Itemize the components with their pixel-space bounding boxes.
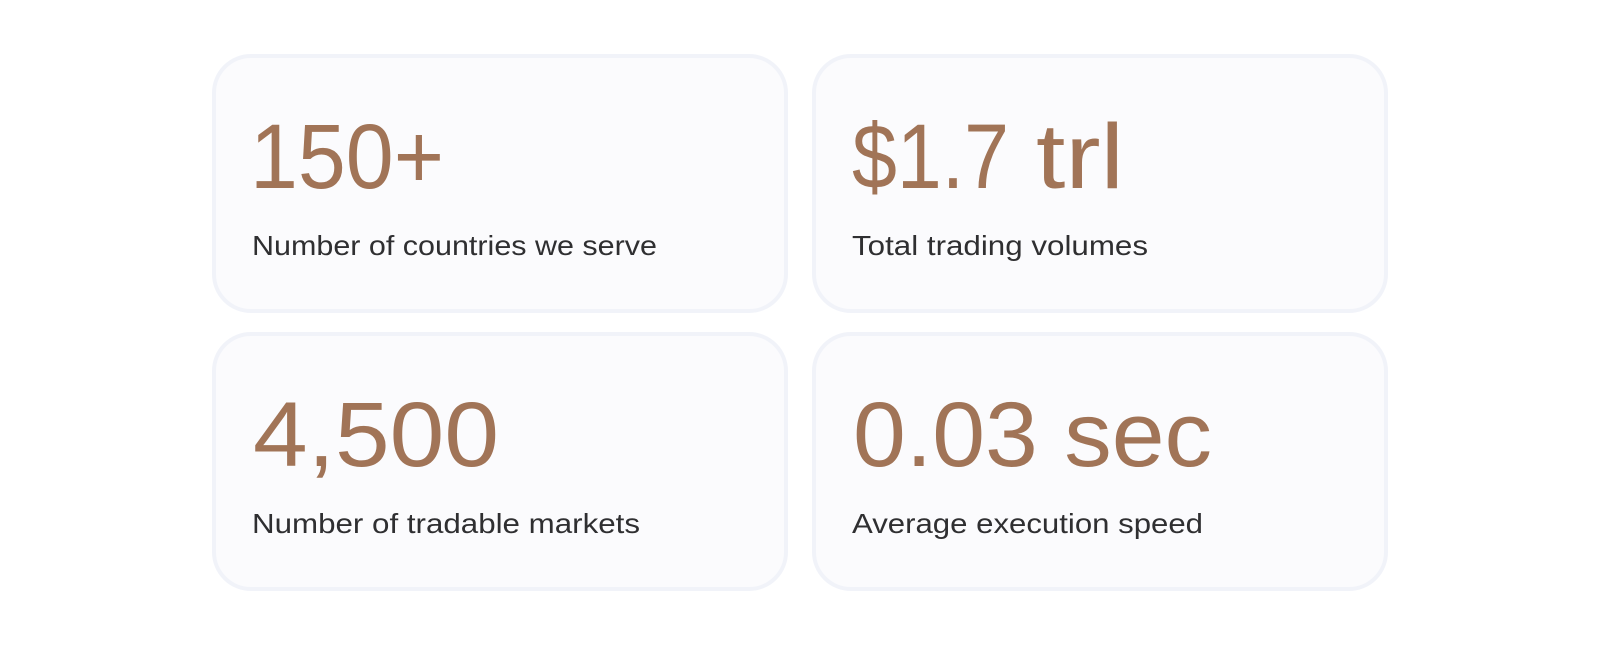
stat: $1.7 trl: $1.7: [852, 106, 1009, 208]
label: speed: Average execution speed: [852, 508, 1203, 539]
panel: trading volumes: [814, 56, 1386, 311]
stat: $1.7 trl: trl: [1036, 106, 1124, 208]
label: markets: Number of tradable markets: [252, 508, 640, 539]
panel: tradable markets: [214, 334, 786, 589]
stat: 150+: 150+: [250, 106, 444, 208]
stat: 0.03 sec: 0.03 sec: [853, 384, 1212, 486]
panel: countries served: [214, 56, 786, 311]
label: countries: Number of countries we serve: [252, 230, 657, 261]
panel: execution speed: [814, 334, 1386, 589]
stat: 4,500: 4,500: [253, 384, 499, 486]
label: volumes: Total trading volumes: [852, 230, 1148, 261]
